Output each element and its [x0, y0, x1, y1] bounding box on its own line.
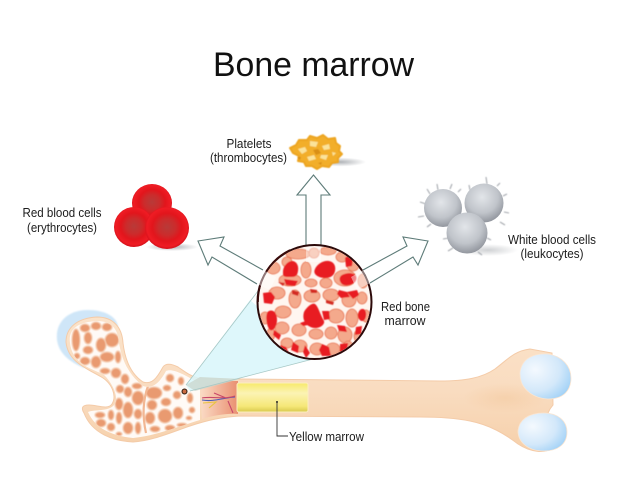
title: Bone marrow — [213, 46, 414, 84]
label: red bone marrow — [381, 299, 430, 328]
label: red bone marrow: Red bone — [381, 299, 430, 314]
label: white blood cells — [508, 232, 596, 261]
icon: platelets cluster — [290, 135, 366, 169]
arrow: to platelets — [297, 175, 330, 250]
red bone marrow circle — [258, 245, 372, 359]
blood vessels — [202, 393, 235, 413]
label: red blood cells: (erythrocytes) — [27, 220, 97, 235]
label: platelets: Platelets — [226, 136, 272, 151]
trabecular bone texture — [70, 321, 200, 438]
cartilage: upper left head — [57, 310, 118, 368]
label: red bone marrow: marrow — [384, 313, 426, 328]
label: red blood cells — [22, 205, 102, 235]
label: white blood cells: White blood cells — [508, 232, 596, 247]
panel: bone — [57, 310, 571, 451]
zoom cone — [186, 300, 317, 391]
icon: white blood cells — [418, 177, 518, 256]
arrow: to white blood cells — [363, 237, 428, 283]
label: white blood cells: (leukocytes) — [520, 246, 584, 261]
flare shading near right joint — [463, 383, 547, 413]
label: platelets: (thrombocytes) — [210, 150, 287, 165]
label: yellow marrow: Yellow marrow — [289, 429, 365, 444]
red marrow cavity — [200, 381, 238, 419]
yellow marrow — [237, 383, 308, 412]
label: platelets — [210, 136, 287, 165]
icon: red blood cells — [114, 184, 198, 251]
cartilage: upper right head — [520, 354, 571, 399]
cone edges — [186, 291, 317, 391]
arrow bases over circle — [257, 247, 370, 290]
cartilage: lower right head — [518, 413, 567, 451]
arrow: to red blood cells — [198, 237, 263, 284]
bone sample marker — [182, 389, 187, 394]
bone outline and shaft — [66, 317, 553, 451]
label: red blood cells: Red blood cells — [22, 205, 102, 220]
leader line: yellow marrow — [276, 401, 288, 436]
cone over bone — [186, 377, 240, 391]
